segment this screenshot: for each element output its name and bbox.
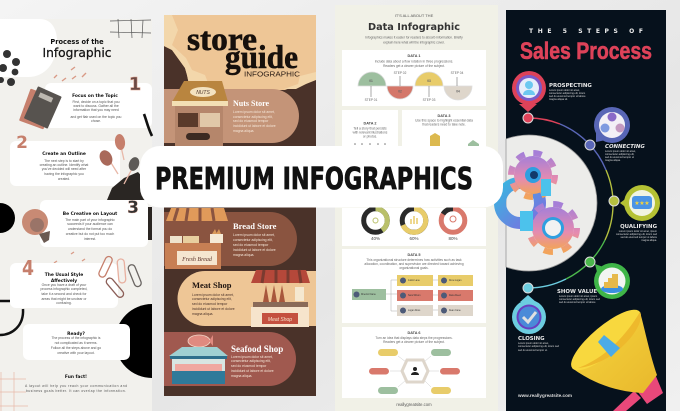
title: sales process: THE 5 STEPS OF bbox=[529, 28, 643, 35]
card: org chart: DATA 5 bbox=[407, 253, 421, 257]
card: data 1 semicircle chart: STEP 02 bbox=[394, 71, 407, 75]
number 2: 2 bbox=[16, 133, 28, 153]
card: the usual style: confusing. bbox=[56, 301, 72, 305]
card: create an outline: Create an Outline bbox=[42, 151, 86, 157]
icon: megaphone bbox=[563, 301, 663, 411]
card: data 1 semicircle chart: 03 bbox=[427, 79, 431, 83]
title: process of the infographic bbox=[42, 38, 112, 60]
card: be creative on layout bbox=[40, 200, 148, 247]
footer url: reallygreatsite.com bbox=[396, 402, 432, 407]
donut 40%: 40% bbox=[371, 236, 380, 241]
card: org chart: Drew Logan bbox=[449, 279, 462, 282]
section: meat shop: magna aliqua. bbox=[192, 312, 213, 316]
icon: paper clips bbox=[98, 255, 142, 299]
card: create an outline: The next step is to start by bbox=[44, 159, 84, 163]
card: hexagon diagram bbox=[342, 327, 486, 398]
step: qualifying: ★ bbox=[644, 200, 650, 207]
card: data 1 semicircle chart: 02 bbox=[398, 90, 402, 94]
title: process of the infographic: Process of the bbox=[50, 38, 104, 46]
step: qualifying: sed do eiusmod tempor ut labore bbox=[620, 236, 658, 239]
card: focus on the topic bbox=[45, 83, 152, 128]
card: be creative on layout: Be Creative on Layout bbox=[63, 211, 117, 217]
title: data infographic: explain here what will the infographic cover. bbox=[383, 40, 445, 44]
card: be creative on layout: The main part of your infographic bbox=[65, 218, 115, 222]
card: focus on the topic: First, decide on a topic that you bbox=[72, 100, 120, 104]
section: nuts store: consectetur adipiscing elit, bbox=[233, 115, 273, 119]
donut 60%: 60% bbox=[409, 236, 419, 241]
process curve bbox=[528, 118, 613, 288]
card: data 1 semicircle chart: STEP 01 bbox=[365, 98, 378, 102]
section: nuts store: Nuts Store bbox=[233, 99, 270, 108]
step: prospecting: magna aliqua sit. bbox=[549, 98, 568, 101]
step: qualifying bbox=[616, 185, 660, 242]
card: focus on the topic: chose. bbox=[91, 119, 101, 123]
card: focus on the topic: Focus on the Topic bbox=[72, 93, 118, 99]
section: seafood shop: incididunt ut labore et dolore bbox=[231, 369, 274, 373]
card: hexagon diagram: Readers get a clearer picture of the subject. bbox=[383, 340, 445, 344]
card: focus on the topic: and get flair used on the topic you bbox=[71, 115, 122, 119]
step: closing: Lorem ipsum dolor sit amet, bbox=[518, 342, 549, 345]
icon: meat stall: Meat Shop bbox=[268, 317, 292, 323]
step: qualifying: ★ bbox=[639, 200, 645, 207]
section: nuts store: incididunt ut labore et dolore bbox=[233, 124, 276, 128]
card: create an outline: you've decided will need after bbox=[42, 167, 87, 171]
section: bread store: magna aliqua. bbox=[233, 253, 254, 257]
section: meat shop bbox=[178, 270, 316, 327]
section: meat shop: incididunt ut labore et dolore bbox=[192, 307, 235, 311]
step: prospecting: Lorem ipsum dolor sit amet, bbox=[549, 89, 580, 92]
step: prospecting bbox=[512, 71, 592, 112]
icon: push pins bbox=[97, 133, 141, 184]
donut 80% bbox=[441, 209, 465, 241]
section: seafood shop: magna aliqua. bbox=[231, 374, 252, 378]
card: data 2: with relevant illustrations bbox=[353, 130, 388, 134]
step: show value: Lorem ipsum dolor sit amet, ipsum bbox=[559, 295, 597, 298]
card: org chart: Dean Cane bbox=[449, 310, 461, 312]
section: bread store: incididunt ut labore et dolore bbox=[233, 248, 276, 252]
card: be creative on layout: understand the format you do bbox=[68, 227, 112, 231]
card: org chart: Logan Ross bbox=[408, 310, 421, 312]
title: sales process: Sales Process bbox=[520, 38, 652, 65]
step: connecting: consectetur adipiscing elit, bbox=[605, 153, 635, 156]
step: connecting: Lorem ipsum dolor sit amet, bbox=[605, 150, 636, 153]
footer url: www.reallygreatsite.com bbox=[517, 393, 572, 398]
card: data 1 semicircle chart: Readers get a clearer picture of the subject. bbox=[383, 64, 445, 68]
section: seafood shop: sed do eiusmod tempor bbox=[231, 364, 267, 368]
card: data 3 bar chart bbox=[402, 110, 486, 147]
white circle with gears bbox=[500, 135, 597, 271]
donut 40% bbox=[364, 209, 387, 241]
number 1: 1 bbox=[129, 74, 141, 95]
card: create an outline: creating an outline. Identify what bbox=[40, 163, 88, 167]
step: prospecting: sed do eiusmod tempor ut labore bbox=[549, 95, 586, 98]
step: prospecting: consectetur adipiscing elit, lorem bbox=[549, 92, 585, 95]
section: meat shop: consectetur adipiscing elit, bbox=[192, 297, 232, 301]
section: nuts store bbox=[164, 81, 299, 146]
section: seafood shop: Lorem ipsum dolor sit amet, bbox=[231, 355, 273, 359]
card: data 1 semicircle chart: Include data about a flow rotation in three progressions. bbox=[375, 60, 453, 64]
step: show value bbox=[557, 263, 630, 304]
step: connecting: sed do eiusmod tempor ut bbox=[605, 156, 634, 159]
icon: bread stall: Fresh Bread bbox=[181, 257, 213, 263]
panel: data infographic bbox=[335, 5, 498, 411]
section: meat shop: Meat Shop bbox=[192, 280, 232, 290]
card: ready: Ready? bbox=[67, 331, 85, 337]
card: data 2: DATA 2 bbox=[363, 122, 377, 126]
card: the usual style bbox=[10, 263, 118, 308]
icon: books bbox=[19, 86, 62, 129]
card: focus on the topic: information that you may need bbox=[73, 108, 119, 112]
section: bread store: sed do eiusmod tempor bbox=[233, 243, 269, 247]
card: org chart: Sara Wilson bbox=[408, 294, 421, 297]
title: data infographic: IT'S ALL ABOUT THE bbox=[395, 13, 434, 18]
card: hexagon diagram: DATA 6 bbox=[407, 331, 421, 335]
step: qualifying: QUALIFYING bbox=[620, 224, 658, 230]
card: the usual style: Once you have a draft of your bbox=[42, 283, 87, 287]
icon: black shape bbox=[107, 172, 146, 200]
step nodes bbox=[523, 113, 619, 293]
step: qualifying: ★ bbox=[634, 200, 640, 207]
card: create an outline: created. bbox=[58, 177, 70, 181]
section: meat shop: Lorem ipsum dolor sit amet, bbox=[192, 293, 234, 297]
step: show value: SHOW VALUE bbox=[557, 289, 597, 295]
card: be creative on layout: creative but do not put too much bbox=[66, 232, 114, 236]
step: closing: CLOSING bbox=[518, 336, 545, 342]
card: ready: creative with your layout. bbox=[57, 351, 95, 355]
text: fun fact bbox=[25, 374, 127, 393]
section: bread store: Lorem ipsum dolor sit amet, bbox=[233, 233, 275, 237]
black arcs bbox=[0, 301, 23, 335]
card: create an outline bbox=[10, 141, 120, 186]
step: closing bbox=[512, 295, 560, 352]
step: qualifying: magna aliqua. bbox=[641, 239, 657, 242]
donut 60% bbox=[402, 209, 426, 241]
section: bread store: consectetur adipiscing elit, bbox=[233, 238, 273, 242]
card: data 1 semicircle chart: STEP 04 bbox=[451, 71, 464, 75]
card: data 1 semicircle chart: DATA 1 bbox=[407, 54, 421, 58]
panel: store guide bbox=[164, 15, 316, 396]
card: data 3 bar chart: Use this space to highlight essential data bbox=[415, 118, 473, 122]
card: hexagon diagram: Turn an idea that displays data steps the progressions. bbox=[375, 336, 453, 340]
banner: premium infographics: PREMIUM INFOGRAPHICS bbox=[155, 162, 473, 197]
card: data 3 bar chart: that readers need to take note. bbox=[422, 122, 466, 126]
title: store guide: INFOGRAPHIC bbox=[244, 70, 301, 78]
section: bread store bbox=[164, 208, 297, 269]
card: data 2: or photos. bbox=[363, 134, 377, 138]
title: sales process bbox=[520, 28, 652, 65]
section: nuts store: Lorem ipsum dolor sit amet, bbox=[233, 110, 275, 114]
card: ready bbox=[23, 324, 130, 360]
card: be creative on layout: succeeds if your audience can bbox=[67, 222, 113, 226]
card: org chart: This organizational structure determines how activities such as task bbox=[366, 258, 462, 262]
step: show value: sed do eiusmod tempor ut labore bbox=[559, 301, 596, 304]
step: closing: sed do eiusmod tempor ut. bbox=[518, 349, 548, 352]
step: qualifying: consectetur adipiscing elit, lorem sed bbox=[616, 233, 658, 236]
donut 80%: 80% bbox=[448, 236, 458, 241]
step: show value: consectetur adipiscing elit, lorem sed bbox=[559, 298, 601, 301]
section: bread store: Bread Store bbox=[233, 221, 277, 231]
section: seafood shop: consectetur adipiscing elit, bbox=[231, 359, 271, 363]
card: data 1 semicircle chart: STEP 03 bbox=[423, 98, 436, 102]
title: data infographic: Data Infographic bbox=[368, 22, 460, 33]
title: data infographic: Infographics makes it easier for readers to absorb information. Briefly bbox=[365, 36, 463, 40]
card: data 3 bar chart: DATA 3 bbox=[437, 114, 451, 118]
panel: sales process bbox=[500, 10, 666, 411]
card: the usual style: take it a second and check for bbox=[41, 292, 87, 296]
number 4: 4 bbox=[22, 256, 34, 280]
card: data 1 semicircle chart: 01 bbox=[369, 79, 373, 83]
section: meat shop: sed do eiusmod tempor bbox=[192, 302, 228, 306]
card: the usual style: Affectively bbox=[51, 278, 77, 284]
card: the usual style: process infographic completed, bbox=[41, 287, 88, 291]
card: org chart: Justin Lane bbox=[408, 279, 420, 282]
text: fun fact: business goals better. It can overlap the information. bbox=[26, 389, 126, 393]
section: nuts store: magna aliqua. bbox=[233, 129, 254, 133]
section: nuts store: sed do eiusmod tempor bbox=[233, 119, 269, 123]
card: org chart: Dana Reed bbox=[449, 295, 461, 297]
step: connecting: CONNECTING bbox=[605, 144, 645, 150]
card: create an outline: having the infographic you bbox=[44, 172, 84, 176]
decorative dark dots bbox=[0, 50, 20, 86]
card: org chart: Director Name bbox=[361, 293, 377, 296]
card: data 1 semicircle chart bbox=[342, 50, 486, 106]
title: store guide: guide bbox=[225, 40, 298, 76]
text: fun fact: Fun fact! bbox=[65, 374, 87, 380]
card: the usual style: The Usual Style bbox=[45, 272, 83, 278]
step: closing: consectetur adipiscing elit, lorem sed bbox=[518, 345, 560, 348]
card: ready: The process of the infographic is bbox=[51, 336, 101, 340]
card: data 2 bbox=[342, 110, 398, 147]
card: data 1 semicircle chart: 04 bbox=[456, 90, 460, 94]
card: the usual style: areas that might be unclear or bbox=[41, 297, 87, 301]
card: be creative on layout: interest. bbox=[84, 237, 96, 241]
title: process of the infographic: Infographic bbox=[42, 46, 112, 60]
panel: process of the infographic bbox=[0, 19, 152, 411]
card: ready: not complicated as it seems. bbox=[55, 341, 97, 345]
card: focus on the topic: want to discuss. Gather all the bbox=[73, 104, 119, 108]
card: org chart bbox=[342, 249, 486, 323]
title: store guide: store bbox=[187, 22, 257, 58]
card: org chart: organizational goals. bbox=[399, 266, 429, 270]
card: org chart: allocation, coordination, and supervision are directed toward achieving bbox=[364, 262, 464, 266]
step: connecting: magna aliqua. bbox=[605, 159, 621, 162]
text: fun fact: A layout will help you reach your communication and bbox=[25, 384, 127, 388]
card: ready: Follow all the steps above and go bbox=[51, 346, 101, 350]
card: data 2: Tell a story that persists bbox=[353, 126, 387, 130]
step: connecting bbox=[594, 107, 645, 162]
icon: seafood stall bbox=[169, 335, 228, 384]
icon: light bulb bbox=[22, 209, 50, 243]
number 3: 3 bbox=[127, 198, 139, 218]
black circle bbox=[115, 304, 152, 378]
icon: nuts stall: NUTS bbox=[196, 90, 210, 96]
section: seafood shop: Seafood Shop bbox=[231, 344, 283, 354]
step: qualifying: Lorem ipsum dolor sit amet, ipsum bbox=[619, 230, 657, 233]
section: seafood shop bbox=[164, 332, 296, 386]
banner: premium infographics bbox=[140, 146, 503, 208]
card: donut charts bbox=[342, 208, 486, 246]
title: data infographic bbox=[365, 13, 463, 44]
title: store guide bbox=[187, 22, 301, 78]
step: prospecting: PROSPECTING bbox=[549, 83, 592, 89]
